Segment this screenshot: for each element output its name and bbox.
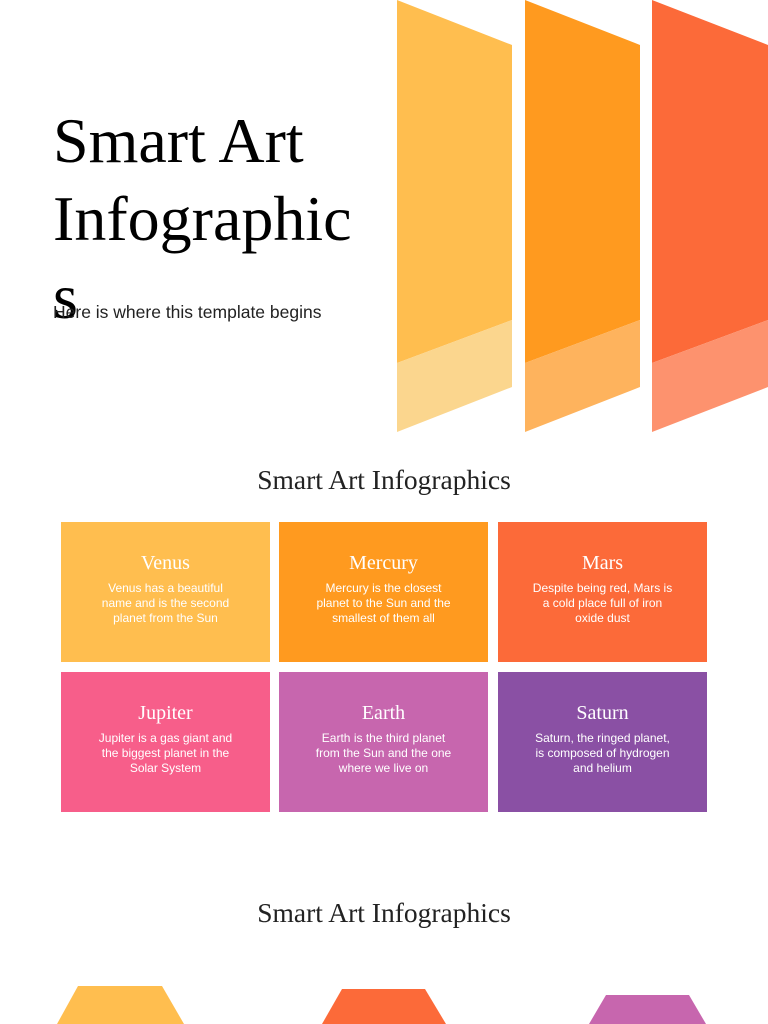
card: Mercury: Mercury is the closest planet to the Sun and the smallest of them all <box>316 581 451 625</box>
card: Saturn: Saturn, the ringed planet, is composed of hydrogen and helium <box>535 731 670 775</box>
card: Mars: Mars <box>582 552 623 574</box>
card: Venus: Venus <box>141 552 190 574</box>
bottom trapezoids <box>57 986 706 1024</box>
card: Earth: Earth <box>362 702 405 724</box>
card: Mars: Despite being red, Mars is a cold place full of iron oxide dust <box>533 581 672 625</box>
card: Jupiter <box>61 672 270 812</box>
card: Jupiter: Jupiter is a gas giant and the biggest planet in the Solar System <box>99 731 232 775</box>
card: Mars <box>498 522 707 662</box>
card: Mercury: Mercury <box>349 552 418 574</box>
card: Earth <box>279 672 488 812</box>
heading 1: Smart Art Infographics <box>257 464 511 495</box>
card: Earth: Earth is the third planet from the Sun and the one where we live on <box>316 731 451 775</box>
subtitle: Here is where this template begins <box>53 302 321 322</box>
title: Smart Art Infographic s <box>53 105 352 332</box>
card: Venus <box>61 522 270 662</box>
card: Venus: Venus has a beautiful name and is the second planet from the Sun <box>102 581 229 625</box>
heading 2: Smart Art Infographics <box>257 897 511 928</box>
card: Saturn <box>498 672 707 812</box>
card: Saturn: Saturn <box>576 702 629 724</box>
grid <box>61 522 707 812</box>
decorative slanted panels <box>397 0 768 432</box>
card: Jupiter: Jupiter <box>138 702 193 724</box>
card: Mercury <box>279 522 488 662</box>
